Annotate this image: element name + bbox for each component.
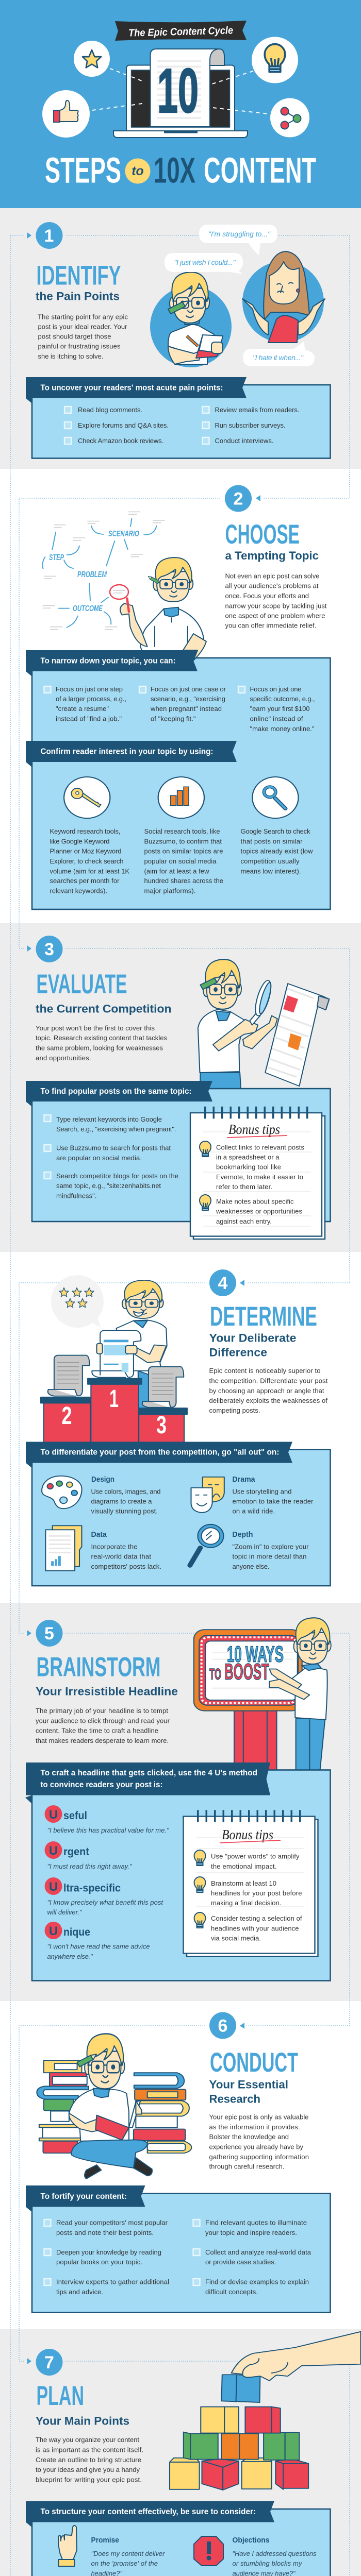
step number 6: 6 — [218, 2016, 227, 2036]
intro text — [38, 313, 128, 360]
intro text: Your post won't be the first to cover this — [36, 1024, 155, 1032]
checklist: narrowing options: of "keeping fit." — [151, 715, 196, 722]
intro text: post is your ideal reader. Your — [38, 323, 127, 331]
research tool descriptions: Keyword research tools, — [50, 827, 121, 835]
checklist: tips and advice. — [56, 2288, 103, 2296]
unique: U — [49, 1924, 58, 1938]
icon: magnifying glass — [252, 777, 299, 818]
item text: design, drama, data, depth: Data — [91, 1531, 107, 1539]
notebook: bonus tips: in a spreadsheet or a — [216, 1153, 280, 1161]
step number 1 — [36, 222, 63, 249]
billboard headline: TO — [209, 1666, 221, 1683]
speech bubble: wish: "I just wish I could..." — [174, 258, 236, 266]
ultra-specific: "I know precisely what benefit this post — [47, 1899, 163, 1906]
heading: CHOOSE — [225, 519, 300, 550]
step number 4: 4 — [218, 1274, 228, 1293]
research tool descriptions: like Google Keyword — [50, 838, 109, 845]
notebook: bonus tips: headlines with your audience — [211, 1925, 299, 1932]
checklist — [44, 2218, 311, 2296]
research tool descriptions: searches per month for — [50, 877, 120, 885]
ribbon: To fortify your content: — [40, 2192, 127, 2201]
item text: design, drama, data, depth: competitors' posts lack. — [91, 1563, 161, 1570]
research tool descriptions: relevant keywords). — [50, 887, 107, 894]
podium numbers: 3 — [156, 1412, 167, 1439]
ultra-specific: U — [49, 1880, 58, 1894]
ribbon — [26, 1442, 292, 1468]
intro text: to your ideas and give you a handy — [36, 2466, 140, 2473]
intro text: Create an outline to bring structure — [36, 2456, 141, 2464]
illustration: mind map: STEP — [49, 553, 64, 562]
main title: 10X — [154, 150, 195, 191]
ribbon — [26, 2185, 145, 2212]
intro text: narrow your scope by tackling just — [225, 602, 327, 610]
checklist: Type relevant keywords into Google — [56, 1115, 162, 1123]
subheading: Your Essential — [209, 2078, 288, 2091]
research tool descriptions: major platforms). — [144, 887, 196, 894]
useful: "I believe this has practical value for me." — [47, 1826, 170, 1834]
intro text: you can offer immediate relief. — [225, 621, 317, 630]
research tool descriptions: Buzzsumo, to confirm that — [144, 838, 222, 845]
checklist: are popular on social media. — [56, 1154, 142, 1162]
notebook: bonus tips: Bonus tips — [228, 1122, 280, 1137]
subheading: Research — [209, 2093, 260, 2105]
useful — [44, 1805, 170, 1834]
intro text: as the information it provides. — [209, 2123, 300, 2131]
intro text — [225, 572, 327, 630]
item text: design, drama, data, depth: Incorporate the — [91, 1543, 137, 1551]
notebook: bonus tips: Consider testing a selection of — [211, 1914, 302, 1922]
billboard headline: BOOST — [224, 1659, 269, 1685]
intro text: gathering supporting information — [209, 2153, 309, 2161]
checklist: same topic, e.g., "site:zenhabits.net — [56, 1182, 161, 1190]
research tool descriptions: means low interest). — [240, 868, 301, 875]
illustration: man with marker — [120, 557, 204, 666]
step number 3: 3 — [44, 940, 54, 959]
notebook: bonus tips: via social media. — [211, 1934, 261, 1942]
intro text: once. Focus your efforts and — [225, 592, 309, 600]
item text: design, drama, data, depth: Use storytelling and — [232, 1488, 292, 1495]
item text: design, drama, data, depth: Use colors, images, and — [91, 1488, 161, 1495]
checklist: Review emails from readers. — [215, 406, 299, 414]
intro text: is as important as the content itself. — [36, 2446, 143, 2453]
ribbon — [26, 1081, 212, 1107]
research tool descriptions — [50, 827, 313, 894]
checklist: or provide case studies. — [205, 2258, 276, 2266]
item text: design, drama, data, depth: Drama — [232, 1476, 255, 1484]
step number 5: 5 — [44, 1624, 54, 1643]
item text: design, drama, data, depth — [91, 1476, 314, 1570]
checklist: narrowing options: instead of "find a job." — [56, 715, 122, 722]
research tool descriptions: competition usually — [240, 857, 300, 865]
intro text: topic. Research existing content that tackles — [36, 1034, 167, 1042]
checklist: narrowing options: "create a resume" — [56, 705, 109, 713]
step 4: determine — [26, 1269, 330, 1586]
step 1: identify — [26, 222, 330, 459]
step number 2 — [225, 485, 252, 512]
panel: find popular posts — [26, 1081, 330, 1239]
checklist: difficult concepts. — [205, 2288, 258, 2296]
checklist: Run subscriber surveys. — [215, 421, 286, 429]
intro text: she is itching to solve. — [38, 352, 103, 360]
checklist — [64, 406, 299, 445]
speech bubble: wish — [165, 253, 243, 274]
research tool descriptions: topics already exist (low — [240, 847, 313, 855]
intro text: the same problem, looking for weaknesses — [36, 1044, 163, 1052]
illustration: worried woman — [242, 251, 325, 343]
intro text: your audience to click through and read your — [36, 1717, 170, 1725]
subheading: Your Main Points — [36, 2414, 129, 2428]
intro text: The primary job of your headline is to tempt — [36, 1707, 168, 1715]
checklist: posts and note their best points. — [56, 2229, 154, 2236]
icon circle: thumbs up — [42, 90, 90, 138]
header — [42, 21, 316, 191]
research tool descriptions: Explorer, to check search — [50, 857, 124, 865]
intro text: the competition. Differentiate your post — [209, 1377, 328, 1385]
subheading — [209, 1331, 296, 1359]
item text: promise, objections, flow, completeness: "Have I addressed questions — [232, 2550, 317, 2557]
intro text: The way you organize your content — [36, 2436, 139, 2444]
illustration: man arranging letters — [269, 1618, 331, 1770]
research tool descriptions: (aim for at least a few — [144, 868, 209, 875]
icon: data document — [45, 1526, 81, 1571]
subheading: Your Deliberate — [209, 1331, 296, 1345]
icon: palette — [42, 1476, 82, 1509]
item text: design, drama, data, depth: Depth — [232, 1531, 253, 1539]
intro text — [209, 2113, 309, 2170]
research tool descriptions: hundred shares across the — [144, 877, 223, 885]
useful: seful — [63, 1810, 87, 1822]
panel: structure content — [26, 2501, 330, 2576]
subheading: a Tempting Topic — [225, 549, 319, 562]
intro text — [36, 1024, 167, 1062]
item text: design, drama, data, depth: "Zoom in" to explore your — [232, 1543, 309, 1551]
main title: to — [132, 164, 144, 178]
intro text: experience you already have by — [209, 2143, 303, 2150]
urgent — [44, 1841, 133, 1870]
checklist: narrowing options: of a larger process, e.g., — [56, 695, 126, 703]
item text: design, drama, data, depth: on a wild ride. — [232, 1507, 275, 1515]
intro text: competing posts. — [209, 1406, 260, 1414]
step number 3 — [36, 936, 63, 962]
item text: promise, objections, flow, completeness: "Does my content deliver — [91, 2550, 165, 2557]
intro text: Epic content is noticeably superior to — [209, 1367, 321, 1375]
checklist: Interview experts to gather additional — [56, 2278, 169, 2285]
panel: 4 U's method — [25, 1762, 330, 1980]
step number 1: 1 — [44, 226, 54, 246]
panel: uncover pain points — [26, 377, 330, 459]
document with number 10: 10 — [157, 56, 199, 126]
item text: promise, objections, flow, completeness: Objections — [232, 2536, 269, 2545]
unique — [44, 1922, 150, 1960]
checklist: mindfulness". — [56, 1192, 97, 1199]
ribbon — [25, 1762, 270, 1804]
main title: STEPS — [45, 150, 121, 191]
panel: narrow topic and confirm interest — [26, 634, 330, 909]
subheading: Your Irresistible Headline — [36, 1685, 178, 1698]
notebook: bonus tips: Collect links to relevant posts — [216, 1144, 304, 1151]
item text: design, drama, data, depth: diagrams to create a — [91, 1497, 152, 1505]
checklist: Search, e.g., "exercising when pregnant". — [56, 1125, 176, 1133]
intro text: Not even an epic post can solve — [225, 572, 320, 580]
panel: fortify content — [26, 2185, 330, 2312]
heading: BRAINSTORM — [36, 1652, 161, 1683]
intro text: Bolster the knowledge and — [209, 2133, 289, 2141]
urgent: U — [49, 1844, 58, 1858]
billboard headline: 10 WAYS — [227, 1641, 284, 1667]
intro text: one aspect of one problem where — [225, 612, 325, 619]
intro text: content. Take the time to craft a headline — [36, 1727, 158, 1734]
banner: The Epic Content Cycle: The Epic Content Cycle — [128, 25, 233, 39]
speech bubble: struggling: "I'm struggling to..." — [208, 230, 271, 238]
heading: CONDUCT — [210, 2047, 298, 2078]
illustration: rating speech bubble with stars — [51, 1275, 104, 1328]
useful: U — [49, 1808, 58, 1822]
step 3: evaluate — [26, 936, 330, 1239]
notebook: bonus tips: Evernote, to make it easier to — [216, 1173, 303, 1181]
checklist: narrowing options: Focus on just one step — [56, 685, 123, 693]
illustration: man taking notes — [150, 272, 232, 367]
intro text: all your audience's problems at — [225, 582, 319, 589]
icon: theatre masks — [191, 1477, 224, 1513]
ultra-specific: will deliver." — [47, 1908, 83, 1916]
ribbon — [26, 377, 247, 403]
ribbon: To differentiate your post from the competition, go "all out" on: — [40, 1448, 280, 1457]
ribbon: to convince readers your post is: — [40, 1781, 163, 1789]
notebook: bonus tips: Brainstorm at least 10 — [211, 1879, 276, 1887]
subheading: Difference — [209, 1346, 267, 1359]
intro text — [209, 1367, 328, 1414]
illustration: mind map — [43, 512, 165, 630]
checklist: Find or devise examples to explain — [205, 2278, 309, 2285]
notebook: bonus tips: against each entry. — [216, 1217, 272, 1225]
step number 7: 7 — [44, 2353, 54, 2372]
laptop — [113, 65, 248, 138]
heading: IDENTIFY — [36, 261, 121, 291]
intro text: deliberately exploits the weaknesses of — [209, 1397, 327, 1404]
step 2: choose — [26, 485, 330, 909]
notebook: bonus tips: Bonus tips — [222, 1827, 273, 1842]
checklist: narrowing options: "earn your first $100 — [250, 705, 309, 713]
ribbon: To structure your content effectively, be sure to consider: — [40, 2507, 256, 2516]
intro text: post should target those — [38, 333, 111, 340]
illustration: billboard — [194, 1630, 302, 1770]
ribbon: To uncover your readers' most acute pain points: — [40, 383, 223, 393]
illustration: mind map: PROBLEM — [77, 570, 107, 579]
icon: zoom lens — [190, 1524, 223, 1565]
ribbon — [26, 2501, 274, 2528]
intro text: and opportunities. — [36, 1054, 91, 1062]
notebook: bonus tips: Use "power words" to amplify — [211, 1853, 300, 1860]
step 7: plan — [26, 2332, 361, 2576]
icon circle: star — [74, 41, 110, 77]
ribbon: confirm interest — [26, 741, 237, 767]
step 6: conduct — [26, 2012, 330, 2312]
illustration: winner on podium — [41, 1280, 187, 1442]
checklist — [44, 1115, 178, 1199]
notebook: bonus tips: Make notes about specific — [216, 1197, 294, 1206]
intro text: through careful research. — [209, 2163, 285, 2170]
ultra-specific: ltra-specific — [63, 1883, 121, 1894]
notebook: bonus tips: bookmarking tool like — [216, 1163, 281, 1171]
checklist: your topic and inspire readers. — [205, 2229, 297, 2236]
item text: design, drama, data, depth: visually stunning post. — [91, 1507, 158, 1515]
checklist: popular books on your topic. — [56, 2258, 142, 2266]
item text: promise, objections, flow, completeness: on the 'promise' of the — [91, 2560, 158, 2567]
item text: promise, objections, flow, completeness — [91, 2536, 317, 2576]
ultra-specific — [44, 1877, 163, 1916]
subheading — [209, 2078, 288, 2105]
speech bubble: hate — [243, 342, 315, 366]
intro text: that makes readers desperate to learn more. — [36, 1737, 169, 1744]
checklist: Read blog comments. — [78, 406, 142, 414]
checklist: narrowing options: online" instead of — [250, 715, 303, 722]
checklist: narrowing options: "make money online." — [250, 725, 315, 733]
illustration: hand stacking blocks — [170, 2332, 361, 2490]
checklist: Conduct interviews. — [215, 437, 273, 445]
icon circle: share nodes — [270, 98, 309, 137]
notebook: bonus tips — [184, 1816, 318, 1957]
intro text — [36, 1707, 170, 1744]
intro text — [36, 2436, 143, 2483]
ribbon: To find popular posts on the same topic: — [40, 1087, 192, 1096]
checklist: narrowing options — [44, 685, 315, 733]
checklist: Collect and analyze real-world data — [205, 2248, 311, 2256]
step number 7 — [36, 2349, 63, 2376]
speech bubble: hate: "I hate it when..." — [253, 353, 304, 362]
intro text: Your epic post is only as valuable — [209, 2113, 308, 2121]
speech bubble: struggling — [199, 225, 277, 255]
intro text: by choosing an approach or angle that — [209, 1387, 324, 1395]
heading: PLAN — [36, 2381, 84, 2411]
illustration: mind map: SCENARIO — [108, 530, 139, 538]
checklist: Read your competitors' most popular — [56, 2218, 168, 2227]
podium numbers: 2 — [62, 1402, 72, 1430]
notebook: bonus tips: the emotional impact. — [211, 1862, 276, 1870]
subheading: the Pain Points — [36, 290, 120, 303]
unique: nique — [63, 1926, 90, 1938]
icon: bar chart — [158, 777, 204, 818]
item text: design, drama, data, depth: emotion to take the reader — [232, 1497, 314, 1505]
research tool descriptions: posts on similar topics are — [144, 847, 223, 855]
podium numbers: 1 — [109, 1385, 119, 1413]
icon: pointing hand — [58, 2526, 77, 2566]
icon: warning octagon — [194, 2536, 223, 2566]
step number 6 — [209, 2012, 236, 2039]
notebook: bonus tips: headlines for your post before — [211, 1889, 302, 1897]
research tool descriptions: Social research tools, like — [144, 827, 220, 835]
icon: key — [64, 777, 110, 818]
ribbon: narrow down — [26, 650, 198, 676]
dashed connectors — [92, 69, 268, 114]
checklist: narrowing options: specific outcome, e.g., — [250, 695, 315, 703]
research tool descriptions: popular on social media — [144, 857, 217, 865]
research tool descriptions: that posts on similar — [240, 838, 303, 845]
unique: anywhere else." — [47, 1953, 93, 1960]
item text: design, drama, data, depth: real-world data that — [91, 1553, 151, 1560]
podium numbers — [62, 1385, 167, 1439]
step number 4 — [209, 1269, 236, 1296]
research tool descriptions: Google Search to check — [240, 827, 310, 835]
checklist: Check Amazon book reviews. — [78, 437, 163, 445]
banner: The Epic Content Cycle — [115, 21, 247, 41]
step number 5 — [36, 1620, 63, 1647]
checklist: narrowing options: scenario, e.g., "exercising — [151, 695, 225, 703]
ribbon: confirm interest: Confirm reader interest in your topic by using: — [40, 747, 214, 756]
item text: promise, objections, flow, completeness: Promise — [91, 2536, 119, 2545]
ribbon: To craft a headline that gets clicked, use the 4 U's method — [40, 1769, 257, 1777]
icon circle: light bulb — [252, 37, 298, 83]
checklist: Use Buzzsumo to search for posts that — [56, 1144, 171, 1152]
billboard headline — [209, 1641, 284, 1685]
main title — [45, 150, 316, 191]
illustration: man reading with stacked books — [37, 2033, 191, 2179]
urgent: rgent — [63, 1846, 89, 1858]
checklist: narrowing options: when pregnant" instead — [150, 705, 222, 713]
item text: design, drama, data, depth: anyone else. — [232, 1563, 269, 1570]
checklist: Deepen your knowledge by reading — [56, 2248, 161, 2256]
checklist: narrowing options: Focus on just one case or — [151, 685, 226, 693]
illustration: mind map: OUTCOME — [73, 604, 103, 613]
step 5: brainstorm — [25, 1618, 331, 1980]
item text: design, drama, data, depth: topic in more detail than — [232, 1553, 306, 1560]
intro text: painful or frustrating issues — [38, 342, 121, 350]
checklist: Explore forums and Q&A sites. — [78, 421, 169, 429]
item text: promise, objections, flow, completeness: or stumbling blocks my — [232, 2560, 303, 2567]
urgent: "I must read this right away." — [47, 1862, 133, 1870]
unique: "I won't have read the same advice — [47, 1942, 150, 1951]
checklist: Search competitor blogs for posts on the — [56, 1172, 178, 1180]
panel: differentiate — [26, 1442, 330, 1586]
notebook: bonus tips — [190, 1113, 325, 1239]
subheading: the Current Competition — [36, 1003, 171, 1015]
research tool descriptions: volume (aim for at least 1K — [50, 868, 129, 875]
notebook: bonus tips: weaknesses or opportunities — [216, 1208, 302, 1215]
notebook: bonus tips: making a final decision. — [211, 1899, 282, 1907]
checklist: narrowing options: Focus on just one — [250, 685, 301, 693]
notebook: bonus tips: refer to them later. — [216, 1183, 272, 1191]
intro text: The starting point for any epic — [38, 313, 128, 320]
research tool descriptions: Planner or Moz Keyword — [50, 847, 122, 855]
intro text: blueprint for writing your epic post. — [36, 2476, 142, 2483]
illustration: man inspecting a document — [198, 959, 329, 1089]
step number 2: 2 — [234, 489, 243, 509]
ribbon: narrow down: To narrow down your topic, you can: — [40, 656, 175, 666]
heading: EVALUATE — [36, 969, 127, 999]
item text: design, drama, data, depth: Design — [91, 1476, 114, 1484]
checklist: Find relevant quotes to illuminate — [205, 2218, 307, 2227]
